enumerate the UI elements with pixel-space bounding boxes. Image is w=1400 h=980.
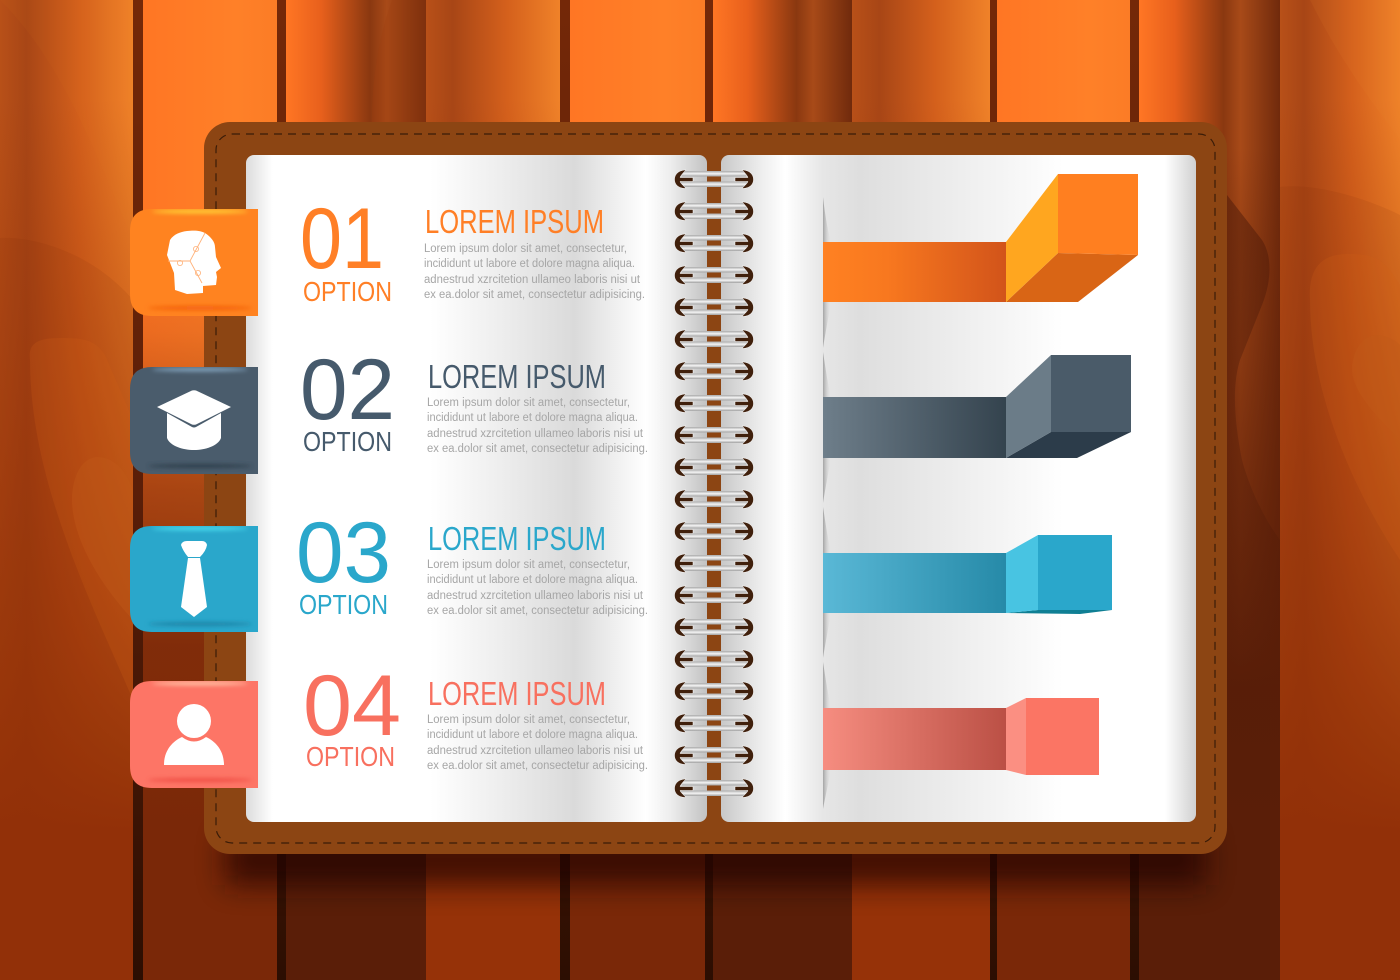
spiral binding	[674, 170, 754, 798]
3D bar 2: slate	[823, 355, 1131, 458]
option 2 text: ex ea.dolor sit amet, consectetur adipisicing.	[427, 443, 648, 455]
option 3 text: adnestrud xzrcitetion ullameo laboris nisi ut	[427, 590, 644, 602]
icon: graduation cap	[157, 390, 231, 450]
3D bar 4: coral	[823, 698, 1099, 775]
tab 3: blue	[130, 526, 258, 632]
leather notebook cover	[204, 122, 1227, 854]
option 2 text	[427, 358, 648, 455]
option 3 label: 03	[296, 505, 391, 601]
left page	[246, 155, 707, 822]
option 4 text	[427, 675, 648, 772]
option 4 label: 04	[303, 658, 401, 754]
option 2 label: OPTION	[303, 426, 392, 457]
option 3 label: OPTION	[299, 589, 388, 620]
option 3 text: ex ea.dolor sit amet, consectetur adipisicing.	[427, 605, 648, 617]
option 4 text: adnestrud xzrcitetion ullameo laboris nisi ut	[427, 745, 644, 757]
tab 1: orange	[130, 209, 258, 316]
option 1 text: LOREM IPSUM	[425, 203, 604, 240]
icon: head puzzle	[167, 231, 221, 294]
3D bar 3: blue	[823, 535, 1112, 614]
option 3 text: LOREM IPSUM	[428, 520, 606, 557]
option 2 label: 02	[300, 342, 395, 438]
page slit shadows on right page	[823, 197, 831, 809]
icon: necktie	[181, 541, 207, 617]
option 2 text: LOREM IPSUM	[428, 358, 606, 395]
option 3 text: incididunt ut labore et dolore magna aliqua.	[427, 574, 638, 586]
option 4 label: OPTION	[306, 741, 395, 772]
option 3 text	[427, 520, 648, 617]
right page	[721, 155, 1196, 822]
option 1 label: OPTION	[303, 276, 392, 307]
option 1 text: adnestrud xzrcitetion ullameo laboris nisi ut	[424, 274, 641, 286]
tab 2: slate	[130, 367, 258, 474]
option 1 text: ex ea.dolor sit amet, consectetur adipisicing.	[424, 289, 645, 301]
icon: person	[164, 704, 224, 765]
option 3 text: Lorem ipsum dolor sit amet, consectetur,	[427, 559, 630, 571]
option 4 text: incididunt ut labore et dolore magna aliqua.	[427, 729, 638, 741]
option 1 label: 01	[300, 191, 384, 287]
3D bar 1: orange	[823, 174, 1138, 302]
option 1 text	[424, 203, 645, 301]
tab 4: coral	[130, 681, 258, 788]
option 4 text: LOREM IPSUM	[428, 675, 606, 712]
option 2 text: adnestrud xzrcitetion ullameo laboris nisi ut	[427, 428, 644, 440]
notebook shadow	[225, 835, 1206, 885]
option 1 text: Lorem ipsum dolor sit amet, consectetur,	[424, 243, 627, 255]
option 1 text: incididunt ut labore et dolore magna aliqua.	[424, 258, 635, 270]
option 2 text: incididunt ut labore et dolore magna aliqua.	[427, 412, 638, 424]
option 4 text: ex ea.dolor sit amet, consectetur adipisicing.	[427, 760, 648, 772]
option 4 text: Lorem ipsum dolor sit amet, consectetur,	[427, 714, 630, 726]
option 2 text: Lorem ipsum dolor sit amet, consectetur,	[427, 397, 630, 409]
